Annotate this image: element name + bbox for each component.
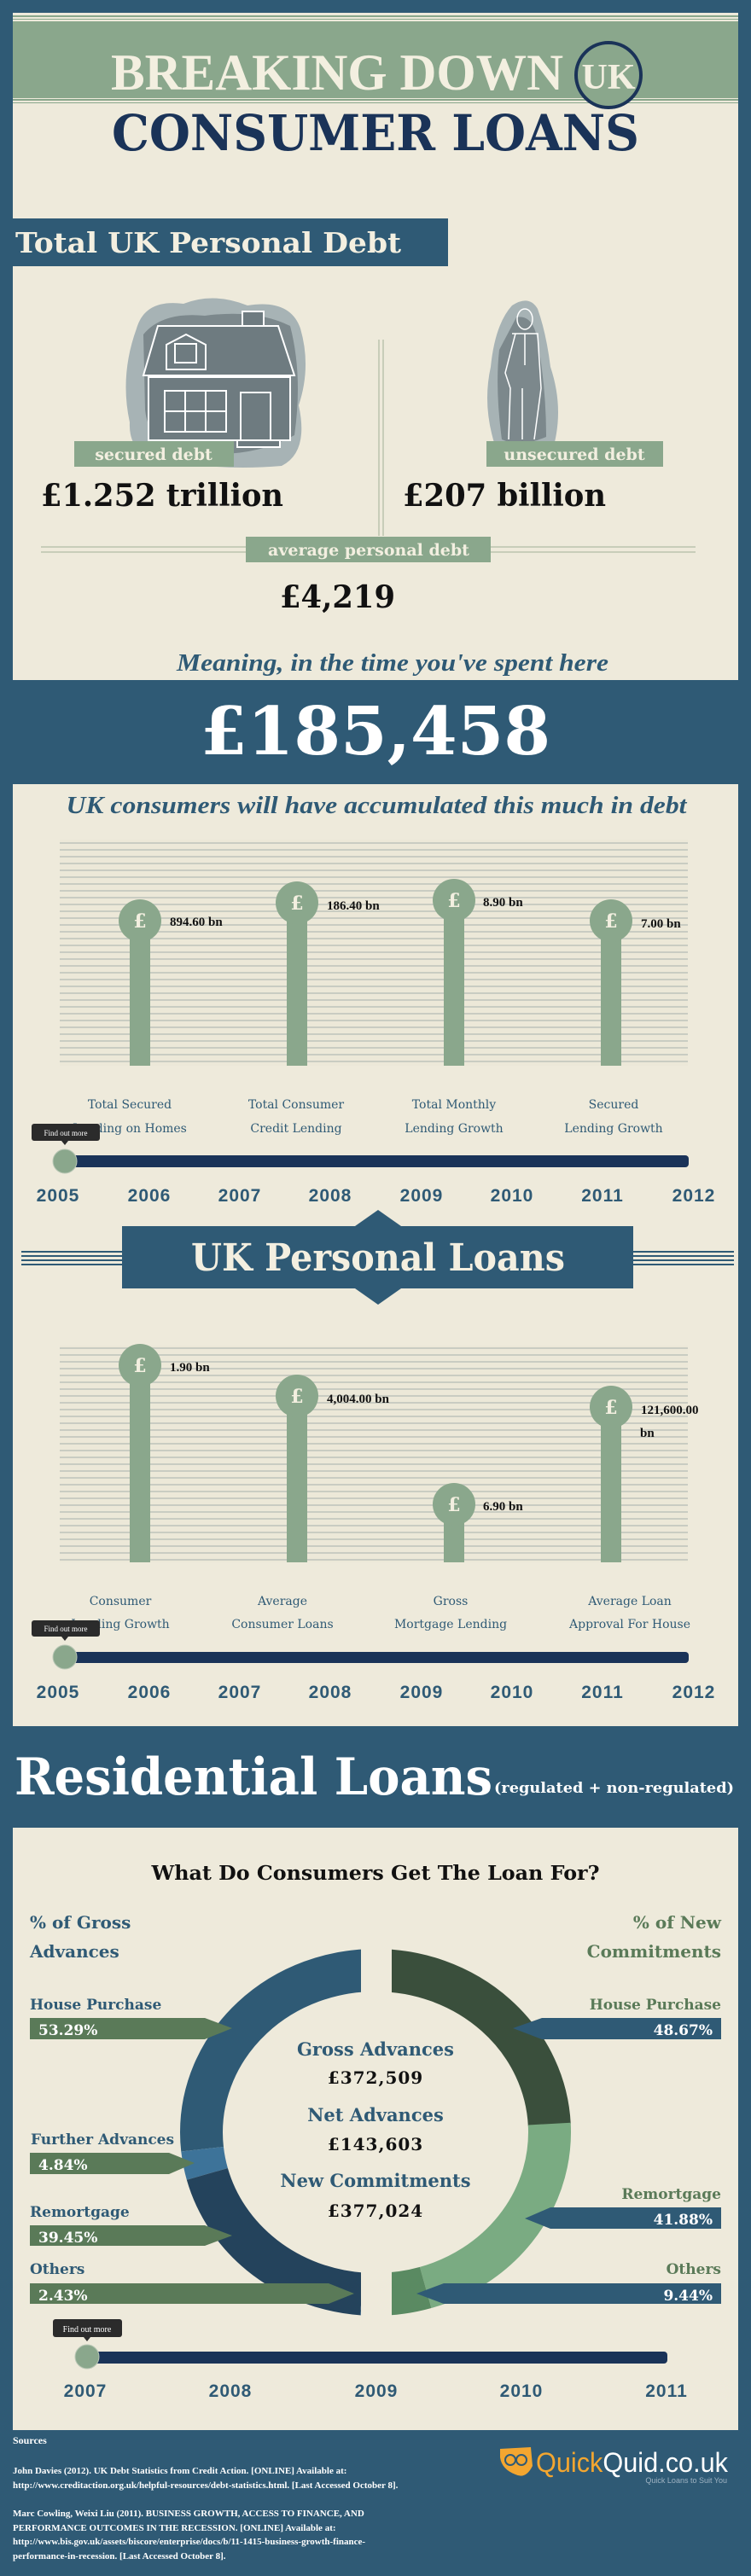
left labels: gross advances: [30, 1997, 354, 2305]
right labels: new commitments: 48.67%: [654, 2022, 713, 2039]
chart: personal loans lollipops: Gross: [434, 1595, 468, 1608]
right labels: new commitments: [416, 1997, 721, 2305]
timeline slider 3: 2008: [209, 2381, 252, 2401]
timeline slider 1: 2012: [672, 1186, 715, 1206]
panel: charts: [13, 784, 738, 1726]
timeline slider 3: Find out more: [63, 2325, 112, 2335]
legend headings: Advances: [29, 1941, 119, 1962]
timeline slider 2: 2009: [400, 1683, 443, 1702]
left labels: gross advances: Remortgage: [30, 2204, 130, 2221]
divider lines: [41, 340, 696, 553]
timeline slider 2: 2008: [309, 1683, 352, 1702]
timeline slider 1: [32, 1124, 715, 1206]
sources text: John Davies (2012). UK Debt Statistics from Credit Action. [ONLINE] Available at:: [13, 2466, 346, 2476]
chart: total debt lollipops: £: [290, 893, 304, 915]
center totals: New Commitments: [280, 2170, 471, 2191]
timeline slider 2: [32, 1620, 715, 1702]
chart: personal loans lollipops: 4,004.00 bn: [327, 1393, 390, 1406]
timeline slider 2: 2011: [581, 1683, 624, 1702]
sources text: PERFORMANCE OUTCOMES IN THE RECESSION. [ONLINE] Available at:: [13, 2523, 336, 2533]
right labels: new commitments: Remortgage: [621, 2186, 721, 2203]
chart: personal loans lollipops: £: [604, 1397, 618, 1419]
logo: QuickQuid: QuickQuid.co.uk: [536, 2447, 729, 2478]
panel: header and total debt: [13, 13, 738, 680]
timeline slider 1: 2006: [128, 1186, 171, 1206]
right labels: new commitments: Others: [667, 2261, 721, 2278]
timeline slider 2: 2010: [491, 1683, 533, 1702]
timeline slider 1: 2009: [400, 1186, 443, 1206]
icon: UK circle: [576, 43, 641, 108]
chart: personal loans lollipops: Mortgage Lending: [394, 1618, 507, 1631]
right labels: new commitments: 41.88%: [654, 2212, 713, 2229]
sources text: [13, 2434, 399, 2561]
left labels: gross advances: Further Advances: [31, 2131, 174, 2149]
chart: personal loans lollipops: [60, 1344, 698, 1631]
chart: personal loans lollipops: Consumer: [90, 1595, 152, 1608]
right labels: new commitments: 9.44%: [663, 2288, 713, 2305]
timeline slider 1: 2007: [218, 1186, 261, 1206]
sources text: performance-in-recession. [Last Accessed October 8].: [13, 2551, 226, 2561]
sources text: http://www.creditaction.org.uk/helpful-resources/debt-statistics.html. [Last Accessed October 8].: [13, 2480, 399, 2491]
text: meaning: Meaning, in the time you've spent here: [176, 649, 608, 677]
chart: personal loans lollipops: Consumer Loans: [231, 1618, 334, 1631]
chart: personal loans lollipops: £: [290, 1386, 304, 1408]
logo: QuickQuid: [500, 2447, 729, 2485]
chart: total debt lollipops: £: [447, 890, 461, 912]
chart: personal loans lollipops: Average: [257, 1595, 307, 1608]
legend headings: [29, 1912, 722, 1962]
title: [111, 43, 641, 162]
chart: personal loans lollipops: Approval For House: [568, 1618, 690, 1631]
chart: total debt lollipops: £: [133, 910, 147, 933]
legend headings: % of Gross: [30, 1912, 131, 1933]
chart: personal loans lollipops: £: [133, 1355, 147, 1377]
chart: total debt lollipops: 7.00 bn: [641, 917, 681, 931]
timeline slider 3: 2010: [500, 2381, 543, 2401]
label: unsecured debt: unsecured debt: [504, 445, 645, 464]
center totals: £372,509: [328, 2067, 423, 2088]
timeline slider 3: 2009: [355, 2381, 398, 2401]
left labels: gross advances: 4.84%: [38, 2157, 88, 2174]
center totals: £143,603: [328, 2134, 423, 2154]
heading: Residential Loans: (regulated + non-regulated): [494, 1780, 734, 1797]
heading: UK Personal Loans banner: UK Personal Loans: [191, 1236, 565, 1280]
timeline slider 3: [53, 2319, 688, 2401]
right labels: new commitments: House Purchase: [590, 1997, 721, 2014]
chart: personal loans lollipops: 121,600.00: [641, 1404, 698, 1417]
timeline slider 1: 2010: [491, 1186, 533, 1206]
chart: total debt lollipops: Total Monthly: [412, 1098, 496, 1112]
chart: personal loans lollipops: Lending Growth: [71, 1618, 170, 1631]
heading: UK Personal Loans banner: [21, 1210, 734, 1305]
timeline slider 1: 2011: [581, 1186, 624, 1206]
value: unsecured: £207 billion: [403, 478, 606, 514]
value: average: £4,219: [280, 579, 395, 615]
chart: total debt lollipops: Total Consumer: [248, 1098, 344, 1112]
timeline slider 3: 2011: [645, 2381, 688, 2401]
chart: total debt lollipops: Lending Growth: [405, 1122, 504, 1136]
chart: total debt lollipops: [60, 840, 688, 1136]
left labels: gross advances: Others: [30, 2261, 84, 2278]
center totals: Gross Advances: [297, 2038, 454, 2060]
label: average personal debt: average personal debt: [268, 541, 469, 560]
label: secured debt: [74, 441, 234, 467]
timeline slider 2: 2006: [128, 1683, 171, 1702]
timeline slider 1: Find out more: [44, 1129, 88, 1137]
chart: total debt lollipops: 8.90 bn: [483, 896, 523, 910]
icon: house: [126, 298, 306, 468]
chart: total debt lollipops: 894.60 bn: [170, 916, 223, 929]
chart: personal loans lollipops: bn: [640, 1427, 655, 1440]
label: unsecured debt: [486, 441, 663, 467]
counter number: £185,458: [201, 693, 550, 770]
center totals: £377,024: [328, 2201, 423, 2221]
logo: QuickQuid: Quick Loans to Suit You: [645, 2476, 727, 2485]
sources text: http://www.bis.gov.uk/assets/biscore/enterprise/docs/b/11-1415-business-growth-finance-: [13, 2537, 365, 2547]
center totals: Net Advances: [307, 2104, 444, 2125]
center totals: [280, 2038, 471, 2221]
left labels: gross advances: 39.45%: [38, 2230, 97, 2247]
sources text: Sources: [13, 2434, 47, 2446]
timeline slider 1: 2008: [309, 1186, 352, 1206]
label: average personal debt: [246, 537, 491, 562]
chart: total debt lollipops: £: [604, 910, 618, 933]
chart: total debt lollipops: Total Secured: [88, 1098, 172, 1112]
left labels: gross advances: 2.43%: [38, 2288, 88, 2305]
chart: total debt lollipops: 186.40 bn: [327, 899, 380, 913]
chart: total debt lollipops: Credit Lending: [250, 1122, 342, 1136]
chart: personal loans lollipops: 1.90 bn: [170, 1361, 210, 1375]
icon: person: [487, 300, 558, 448]
chart title: What Do Consumers Get The Loan For?: [150, 1862, 599, 1885]
chart: total debt lollipops: Lending on Homes: [73, 1122, 187, 1136]
chart: total debt lollipops: Lending Growth: [564, 1122, 663, 1136]
subtitle: UK consumers will have accumulated this much in debt: [67, 792, 688, 819]
chart: personal loans lollipops: Average Loan: [587, 1595, 672, 1608]
icon: UK circle: UK: [582, 58, 636, 97]
value: secured: £1.252 trillion: [41, 478, 283, 514]
chart: personal loans lollipops: 6.90 bn: [483, 1500, 523, 1514]
title: CONSUMER LOANS: [112, 104, 639, 162]
timeline slider 2: 2005: [37, 1683, 79, 1702]
label: secured debt: secured debt: [95, 445, 212, 464]
heading: Residential Loans: Residential Loans: [15, 1747, 492, 1807]
left labels: gross advances: House Purchase: [30, 1997, 161, 2014]
timeline slider 3: 2007: [64, 2381, 107, 2401]
sources text: Marc Cowling, Weixi Liu (2011). BUSINESS GROWTH, ACCESS TO FINANCE, AND: [13, 2509, 364, 2519]
heading: Total UK Personal Debt: [13, 218, 448, 266]
timeline slider 2: 2007: [218, 1683, 261, 1702]
title: BREAKING DOWN: [111, 44, 563, 101]
chart: total debt lollipops: Secured: [589, 1098, 638, 1112]
legend headings: Commitments: [587, 1941, 721, 1962]
left labels: gross advances: 53.29%: [38, 2022, 97, 2039]
legend headings: % of New: [633, 1912, 722, 1933]
timeline slider 2: Find out more: [44, 1625, 88, 1633]
chart: donut: [201, 1937, 550, 2329]
chart: personal loans lollipops: £: [447, 1494, 461, 1516]
timeline slider 1: 2005: [37, 1186, 79, 1206]
timeline slider 2: 2012: [672, 1683, 715, 1702]
panel: residential loans: [13, 1828, 738, 2430]
heading: Total UK Personal Debt: Total UK Personal Debt: [15, 226, 402, 259]
